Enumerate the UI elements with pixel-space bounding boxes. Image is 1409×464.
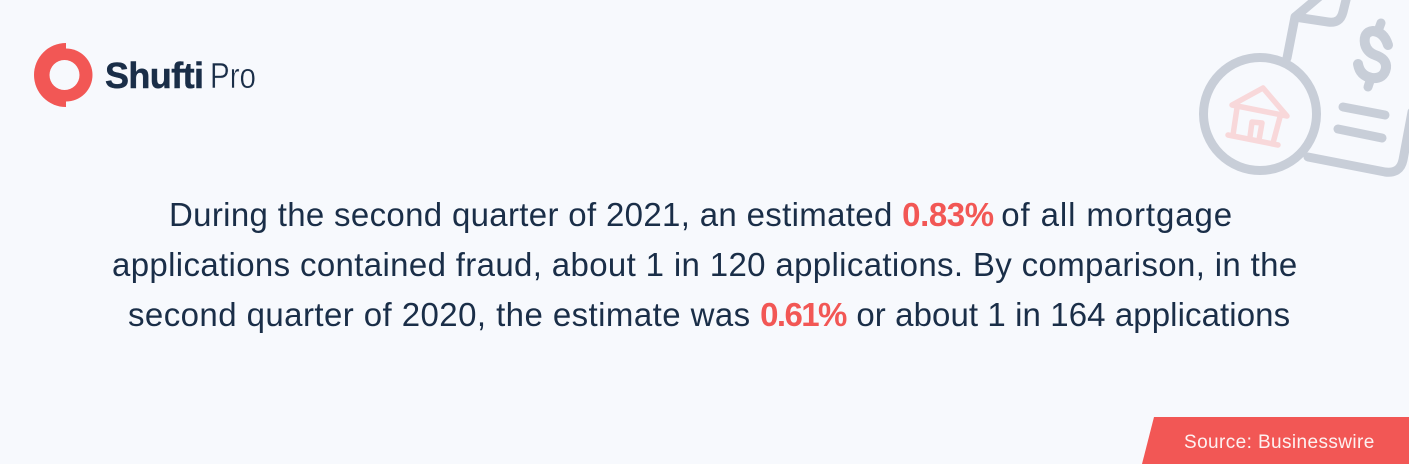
text block: mortgage fraud statistic: During the second quarter of 2021, an estimated 0.83% of all mortgage [169,196,1233,233]
logo wordmark [105,55,256,96]
source text: Source: Businesswire [1184,432,1375,453]
logo [34,43,256,107]
text block: mortgage fraud statistic: applications contained fraud, about 1 in 120 applications. By comparison, in the [112,246,1298,283]
icon: house [1228,88,1287,145]
logo: Pro [210,55,256,96]
source tag [1142,417,1409,464]
icon: magnifier over mortgage document [1199,0,1409,177]
logo mark [34,43,92,107]
logo wordmark: Shufti [105,55,203,96]
text block: mortgage fraud statistic [112,196,1298,333]
text block: mortgage fraud statistic: second quarter of 2020, the estimate was 0.61% or about 1 in 164 applications [128,296,1290,333]
